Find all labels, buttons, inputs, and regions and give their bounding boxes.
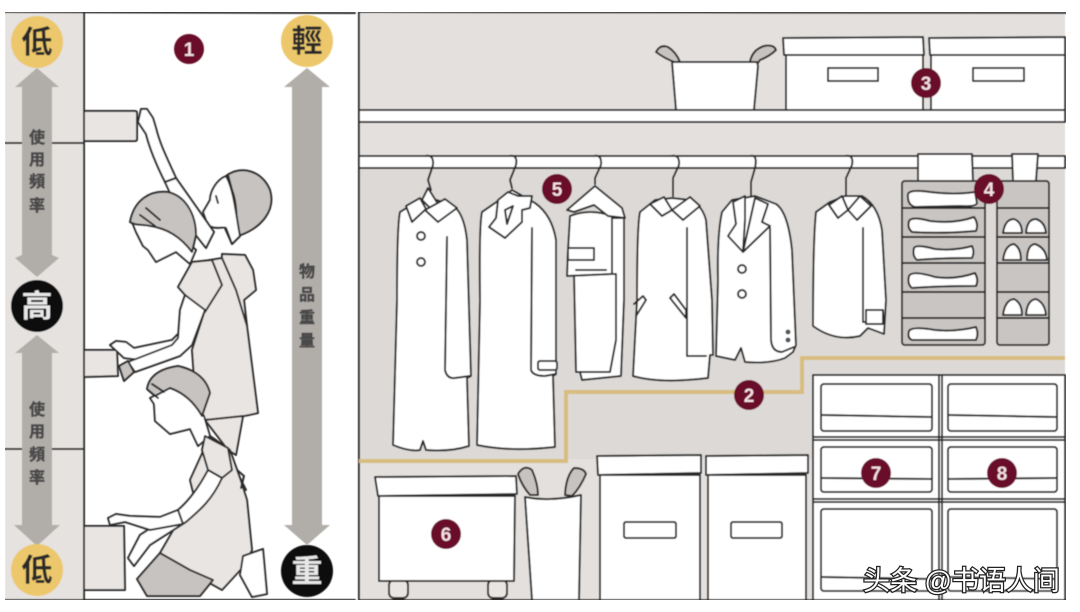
arrow: lower frequency (14, 335, 60, 546)
label: light (281, 15, 333, 67)
panel: height and weight guide (5, 12, 355, 600)
storage box: shelf right (929, 37, 1065, 110)
text: item weight (299, 263, 315, 350)
label: low top (11, 16, 63, 68)
badge 3: 3 (921, 74, 931, 95)
storage box: shelf left (783, 37, 924, 110)
badge 7: 7 (871, 464, 881, 485)
text: upper usage frequency: 用 (29, 152, 45, 169)
badge 8: 8 (997, 464, 1007, 485)
figure: standing woman reaching up (84, 109, 271, 330)
rolling storage box (375, 476, 517, 598)
text: item weight: 重 (299, 309, 315, 327)
label: low bottom: 低 (22, 553, 52, 588)
text: lower usage frequency: 率 (29, 468, 45, 487)
figure: middle woman reaching shelf (84, 192, 258, 420)
text: upper usage frequency (29, 129, 45, 215)
coat 1 (393, 156, 471, 450)
wall strip (5, 13, 84, 600)
text: lower usage frequency: 用 (29, 424, 45, 441)
badge 1 (174, 34, 204, 64)
label: low top: 低 (22, 25, 52, 60)
text: upper usage frequency: 率 (29, 196, 45, 215)
text: upper usage frequency: 頻 (29, 173, 45, 191)
badge 6: 6 (441, 525, 451, 546)
badge 1: 1 (184, 40, 195, 61)
text: lower usage frequency: 使 (29, 401, 45, 419)
drawer unit (813, 375, 1065, 600)
badge 5: 5 (552, 180, 563, 201)
arrow: item weight (284, 68, 330, 545)
text: item weight: 品 (299, 287, 315, 304)
badge 2 (734, 380, 764, 410)
badge 3 (911, 68, 941, 98)
gold line: height divider (359, 358, 1065, 461)
text: lower usage frequency (29, 401, 45, 487)
badge 8 (987, 458, 1017, 488)
storage box: floor right (706, 455, 808, 600)
figure: kneeling woman opening low drawer (84, 366, 267, 597)
watermark: 头条 @书语人间 (863, 566, 1060, 596)
tote bag (518, 468, 586, 600)
label: low bottom (11, 544, 63, 596)
badge 5 (542, 174, 572, 204)
shirt 6 (813, 156, 886, 338)
basket (656, 46, 776, 110)
label: high: 高 (22, 289, 52, 324)
hanging organizer: shoes (997, 154, 1049, 345)
coat 2 (477, 156, 557, 449)
coat 4 (633, 156, 713, 381)
badge 4: 4 (984, 180, 995, 201)
panel: closet (359, 12, 1066, 600)
badge 7 (861, 458, 891, 488)
suit jacket 5 (716, 156, 796, 362)
badge 6 (431, 519, 461, 549)
label: high (11, 280, 63, 332)
closet background (359, 13, 1065, 600)
hanging organizer: clothes (902, 154, 985, 345)
arrow: upper frequency (15, 68, 59, 277)
badge 2: 2 (744, 386, 754, 407)
label: heavy: 重 (292, 554, 322, 589)
text: lower usage frequency: 頻 (29, 446, 45, 464)
text: item weight: 量 (299, 332, 315, 350)
garment 3: jacket and trousers (567, 156, 625, 380)
top shelf (359, 110, 1065, 122)
drawers (821, 384, 1057, 591)
badge 4 (974, 174, 1004, 204)
storage box: floor left (597, 455, 701, 600)
label: light: 輕 (292, 24, 322, 59)
text: item weight: 物 (299, 263, 315, 281)
text: upper usage frequency: 使 (29, 129, 45, 147)
hanging rail (359, 156, 1065, 168)
label: heavy (281, 545, 333, 597)
